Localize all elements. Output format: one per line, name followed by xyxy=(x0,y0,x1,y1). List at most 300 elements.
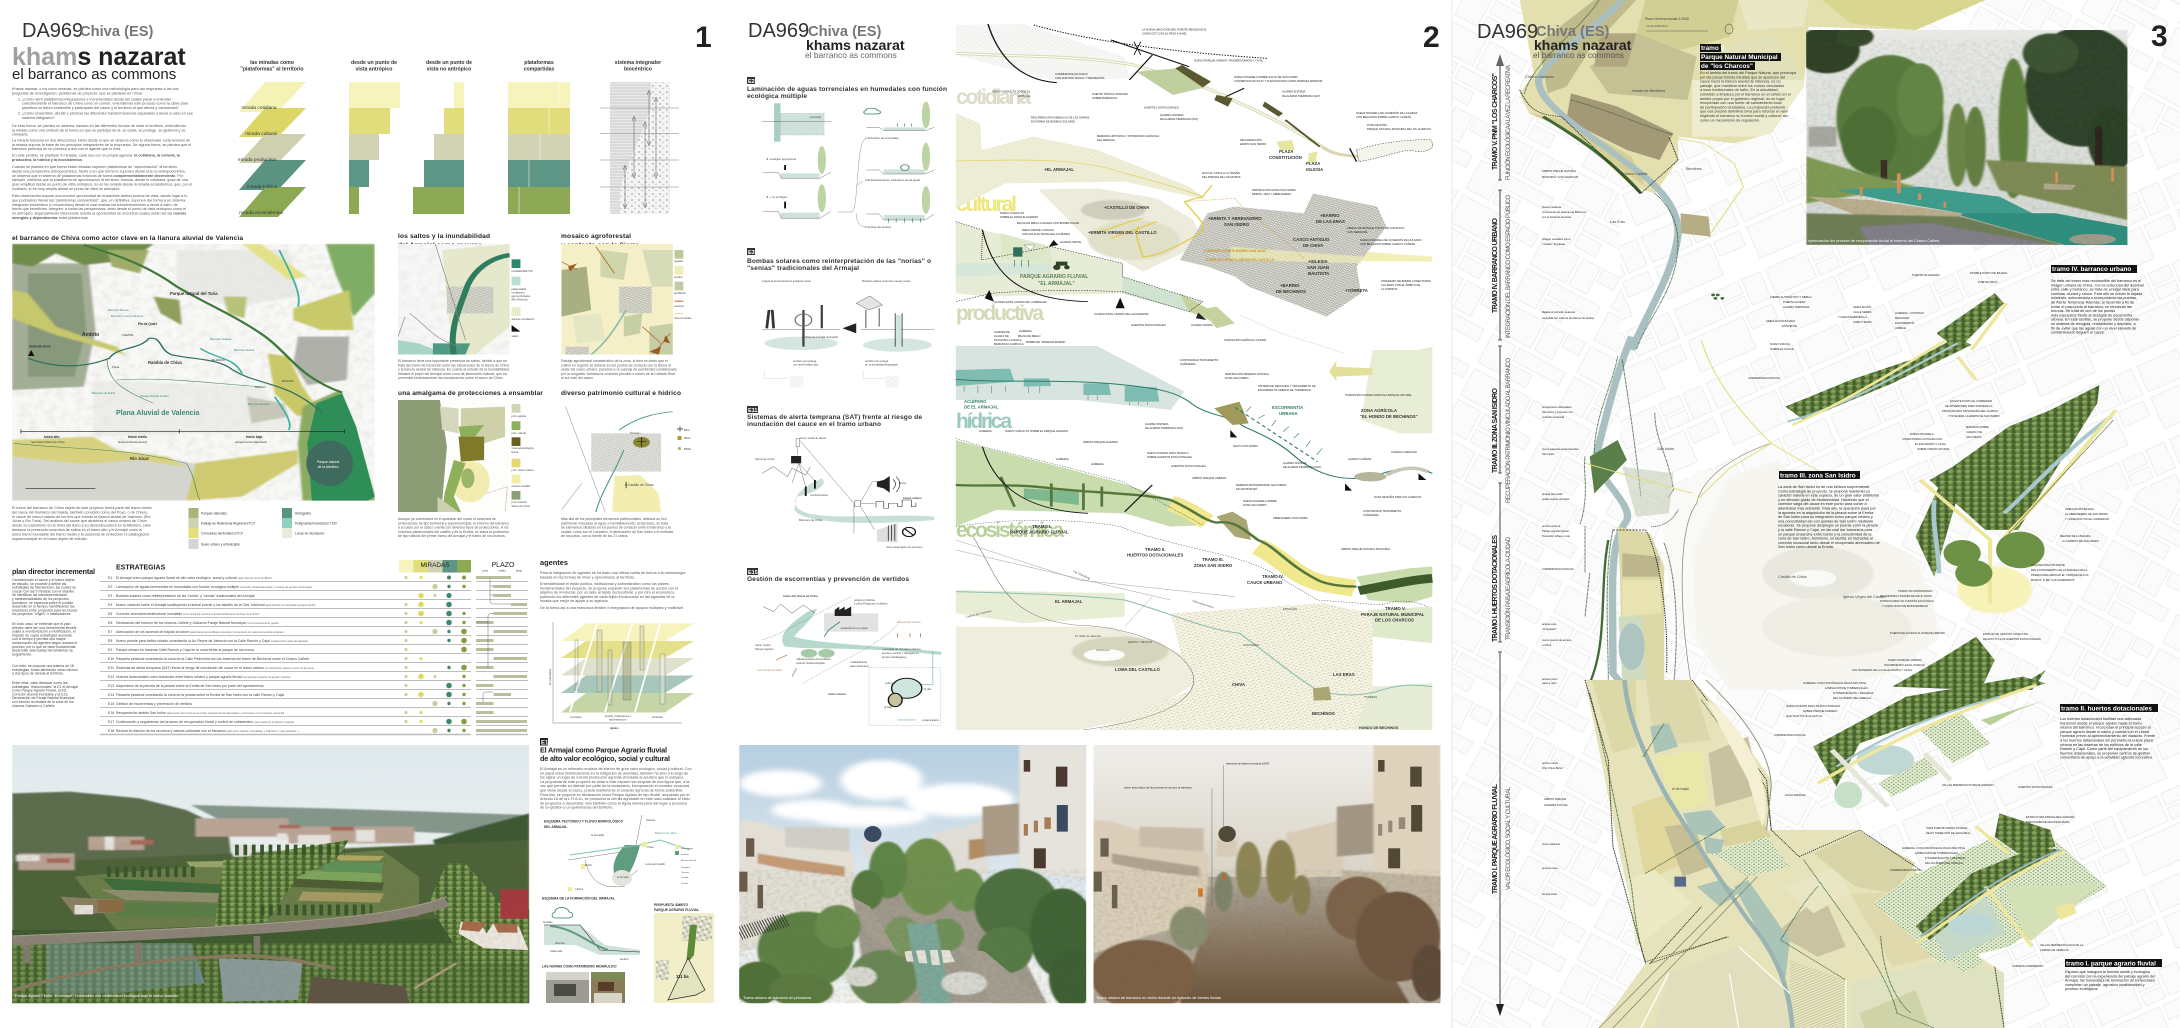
E3 section: solar pumps: Bombas solares como las nuevas norias xyxy=(862,279,911,283)
map annotations: ERMITA SAN ISIDRO xyxy=(1240,142,1266,146)
E1 diagram: tectonic scheme: Buñol xyxy=(585,863,592,867)
E2 section: wetlands: 3.recarga del acuífero xyxy=(865,225,892,229)
plan annotations: nueva pasarela peatonal sobre xyxy=(1542,447,1579,451)
E15 section: runoff management: tramo medio xyxy=(755,643,771,647)
regional map legend: Suelo urbano y urbanizable xyxy=(201,542,240,546)
map annotations: RECUPERACIÓN xyxy=(1240,137,1262,142)
plan annotations: MUNICIPAL "LOS CHARCOS" xyxy=(1542,175,1579,179)
mosaico legend labels: secano xyxy=(674,276,683,279)
protections text xyxy=(398,517,509,538)
mirada labels: productiva xyxy=(956,302,1044,325)
proposed area map: 111 ha xyxy=(676,974,689,979)
street render: flood: Tramo urbano de barranco en otoño durante un episodio de fuertes lluvias xyxy=(1096,996,1221,1000)
tramo V side label: TRAMO V. PNM "LOS CHARCOS" xyxy=(1492,73,1499,170)
table headers: MIRADAS xyxy=(420,562,450,569)
tramo I text block: Armajal, los humedales de laminación de torrenciales xyxy=(2065,979,2155,983)
place names on plan: Castillo de Chiva xyxy=(1778,575,1806,579)
plan director text: desarrollar adecuadas herramientas de xyxy=(12,649,73,653)
plan annotations: SE ADENTRA A TRAVÉS DE ESTE JUNTO xyxy=(1880,593,1932,598)
plan annotations: MOROS" O DE "LOS ALMENDROS" xyxy=(2031,578,2075,582)
intro text block: colectivamente el barranco de Chiva como un común, entendiendo este proceso como la clave para xyxy=(22,102,189,106)
strategy list text: E14 xyxy=(108,693,114,697)
street render: flood: sistemas de alerta temprana (SAT) xyxy=(1226,762,1269,766)
central stacked map of five miradas: Pl. Ollas de Valencia xyxy=(1075,634,1101,638)
plan annotations: PINADA PARA AMPLIAR EL "PARQUE DE LOS xyxy=(2031,573,2089,577)
mosaico text: Paisaje agroforestal característico de la zona, si bien es cierto que el xyxy=(561,359,668,363)
title block panel 3: el barranco as commons xyxy=(1533,50,1624,60)
plan annotations: Nueva pasarela xyxy=(1542,205,1561,209)
strategy list text: Sistemas de alerta temprana (SAT) frente al riesgo de inundación del cauce en el tramo urbano (monitorización, alarma y cierre de accesos) xyxy=(116,666,314,670)
intro text block: En este sentido, se plantean 5 miradas, cada una con su propia agencia: la cotidiana, la cultural, la xyxy=(12,154,181,158)
street render: flood xyxy=(1090,745,1448,1010)
agents diagram: stacked sectors chart: ámbito, instituciones y xyxy=(605,714,632,718)
E1 diagram: tectonic scheme: Charcos xyxy=(681,871,690,874)
regional map of the Valencia alluvial plain: Paisaje Alcalde del Río xyxy=(140,394,169,398)
plan director text: charcos Gabacho y Cañete. xyxy=(12,704,55,708)
plan annotations xyxy=(1542,169,2109,968)
plan annotations: NUEVA PASARELA xyxy=(1910,432,1934,436)
regional map of the Valencia alluvial plain: Barranco Gallego xyxy=(210,337,232,341)
plan annotations: INCORPORADO EN EL PARQUE xyxy=(1884,663,1925,667)
regional map of the Valencia alluvial plain: Rambla de Chiva xyxy=(148,360,182,365)
plan annotations: SAN ISIDRO xyxy=(1966,435,1982,439)
plan director text: los proyectos "origen" o catalizadores. xyxy=(12,612,71,616)
central stacked map of five miradas: SAN JUAN xyxy=(1307,265,1329,270)
heritage text: de elementos situados en los puntos de contacto entre el barranco y la xyxy=(561,526,671,530)
table headers: largo xyxy=(516,568,522,572)
map annotations: ESCORRENTÍA URBANA DE TORRENCIAL xyxy=(1258,388,1312,392)
plan director text: Con esto, se propone una batería de 18 xyxy=(12,664,74,668)
plan director text: de identificar las interdependencias xyxy=(12,593,67,597)
alert diagram xyxy=(762,438,934,543)
map annotations: HUMEDAL xyxy=(1056,457,1070,461)
plan director text: a dos tipos de mirada al territorio. xyxy=(12,672,64,676)
plan annotations: Bajada al corredor peatonal xyxy=(1542,310,1575,314)
plan annotations: HUMEDAL CON FUNCIÓN ECOLÓGICA MÚLTIPLE xyxy=(1803,680,1866,685)
tramo V text block: En el ámbito del tramo del Parque Natural, que preocupa xyxy=(1700,71,1797,75)
central stacked map of five miradas: IGLESIA xyxy=(1306,167,1323,172)
tramo III text block: carácter natural en este espacio, de un gran valor ambiental xyxy=(1778,494,1879,498)
E1 diagram: tectonic scheme: la Serratilla xyxy=(591,833,605,837)
plan director heading: plan director incremental xyxy=(12,567,95,576)
intro text block: no antrópico. Especialmente interesante resulta la oportunidad de encontrar cuales serán así las nuevas xyxy=(12,212,186,216)
regional map of the Valencia alluvial plain: tramo medio xyxy=(128,435,147,439)
regional map of the Valencia alluvial plain xyxy=(12,244,375,501)
strategy list text: E12 xyxy=(108,675,114,679)
strategy list text: E5 xyxy=(108,612,112,616)
strategy list text: Adquisición de la parcela de la pinada sobre la Ermita de San Isidro por parte del ayuntamiento xyxy=(116,684,264,688)
E2 section: wetlands: III. + río ecológico xyxy=(766,195,788,199)
central stacked map of five miradas: LAS ERAS xyxy=(1333,672,1355,677)
saltos legend labels: inundación xyxy=(512,290,525,294)
heading: los saltos xyxy=(398,233,490,249)
tramo III text block: corredor ecosocial tanto desde el recuperado abrevadero de xyxy=(1778,541,1880,545)
strategy list text: Huertos dotacionales como transición entre tramo urbano y parque agrario fluvial incorporando espacios de gestión colectiva xyxy=(116,675,291,679)
plan annotations: Y COMO NODO DE BIODIVERSIDAD xyxy=(1882,604,1928,608)
map annotations: DEPURACIÓN RESERVA NATURAL xyxy=(1225,371,1270,376)
intro text block: Esta observación supone una enorme oportunidad de ensamblar ambos puntos de vista, dando lugar a lo xyxy=(12,194,187,198)
wetland diagrams xyxy=(762,102,934,227)
E15 section: runoff management: tramo alto Sierra de Chiva xyxy=(783,594,818,598)
plan annotations: ÁMBITO PARQUE xyxy=(1544,797,1566,801)
regional map of the Valencia alluvial plain: tramo bajo xyxy=(246,435,262,439)
plan annotations: Chiv Chiva Buñol xyxy=(1542,766,1563,770)
regional map of the Valencia alluvial plain: desde la llanura aluvial xyxy=(118,440,147,444)
mosaico legend labels: pendiente xyxy=(674,291,686,295)
stacked parallelogram miradas: mirada cotidiana xyxy=(241,105,277,111)
central stacked map of five miradas: +BARRIO xyxy=(1280,283,1300,288)
E11 section: alert systems: monitorización xyxy=(810,493,828,497)
tramo V text block: como un mecanismo de regulación. xyxy=(1700,118,1760,122)
heritage legend: BRNs xyxy=(684,447,692,451)
plan annotations: ÁMBITO PARAJE NATURAL xyxy=(1542,169,1577,173)
strategy list text: E17 xyxy=(108,720,114,724)
map annotations: CON BECHINOS SOBRE CHARCO CAÑETE xyxy=(1360,241,1415,246)
plan annotations: Y CONEXIÓN CON EL CORREDOR xyxy=(2065,516,2109,521)
central stacked map of five miradas: DE BECHINOS xyxy=(1276,289,1306,294)
E15 section: runoff management: volumen xyxy=(885,681,896,685)
protections legend labels: Iberia xyxy=(512,450,519,454)
plan director text: Asimismo, se especula sobre el posible xyxy=(12,601,73,605)
plan scale: Plano General escala 1:2000 xyxy=(1645,17,1689,21)
plan annotations: pinada San Isidro xyxy=(1542,492,1563,496)
E11 section: alert systems: envío señal de alerta xyxy=(800,436,826,440)
regional map legend: Hidrografía xyxy=(295,512,311,516)
heritage legend: BICs xyxy=(684,428,690,432)
tramo III text block: Como estrategia de proyecto, se propone mantener su xyxy=(1778,489,1870,493)
sheet number 1: 1 xyxy=(695,21,712,54)
intro text block: comparte. xyxy=(12,133,29,137)
E2 section: wetlands xyxy=(747,77,947,229)
E1 text: de proyectos a desarrollar, sino también como la figura idónea para dar lugar a procesos xyxy=(540,801,687,805)
central stacked map of five miradas: DE LAS ERAS xyxy=(1316,219,1345,224)
title block panel 3: DA969 xyxy=(1477,21,1538,43)
central stacked map of five miradas: CAUCE URBANO xyxy=(1247,580,1283,585)
proposed area map: PROPUESTA ÁMBITO xyxy=(654,902,688,907)
map annotations: SOBRE EL PARQUE AGRARIO xyxy=(1000,215,1038,219)
tramo IV text block: tramo IV. barranco urbano xyxy=(2052,266,2131,273)
intro text block: preguntas de investigación -problemas de proyecto- que se plantean en Chiva: xyxy=(12,91,143,95)
central stacked map of five miradas xyxy=(956,24,1433,730)
tramo V side label: FUNCIÓN ECOLÓGICA A LA VEZ LA RECREATIVA xyxy=(1505,65,1512,180)
place names on plan: Hondo de Bechinos xyxy=(1632,89,1665,93)
title block panel 1 xyxy=(12,20,186,83)
tramo V text block: por las pocas formas miradas que se aparecen del xyxy=(1700,75,1785,79)
strategy list text: E7 xyxy=(108,630,112,634)
strategy list text: Adecuación de los accesos de bajada al cauce garantizando accesibilidad universal e incorporando los sistemas de alerta temprana xyxy=(116,630,284,634)
central stacked map of five miradas: CASCO ANTIGUO xyxy=(1293,237,1330,242)
map annotations: MEMORIA HISTÓRICA Y PATRIMONIO AGRÍCOLA xyxy=(1097,133,1159,138)
layer: hidrica xyxy=(956,346,1432,491)
tramo II text block: a los huertos dotacionales sin perímetro la nueva plaza xyxy=(2060,738,2154,742)
strategy list text: Pasarela peatonal conectando la zona de la Calle Pedroviña con las traseras del barrio de Bechinos sobre el Charco Cañete xyxy=(116,657,309,661)
heritage text: de los patos, con la fuente de los 21 caños. xyxy=(561,534,628,538)
E1 diagram: Armajal formation: ESQUEMA DE LA FORMACIÓN DEL ARMAJAL xyxy=(542,896,615,900)
table headers xyxy=(116,560,522,572)
plan director text: de estudio, se procede a definir las xyxy=(12,582,67,586)
heading: los saltos: del Armajal como recurso xyxy=(398,242,482,249)
tramo II text block: parque agrario desde el casco y cuenta con el Litoral xyxy=(2060,730,2149,734)
map: saltos and flooding xyxy=(396,244,520,355)
map annotations: ITINERARIO DE BORDE CONECTANDO xyxy=(1381,279,1431,283)
intro text block: planificar un futuro sostenible y participado del cauce y el territorio al que afecta y caracteriza? xyxy=(22,106,179,110)
E1 diagram: Armajal formation xyxy=(542,896,640,961)
central stacked map of five miradas: Vía Cheurfeng xyxy=(1073,569,1091,580)
strategy list text: Declaración del entorno de los charcos Cañete y Gabacho Paraje Natural Municipal como herramienta de gestión xyxy=(116,621,280,625)
tramo II text block: huertos dotacionales, se proponen centros de gestión xyxy=(2060,751,2150,755)
tramo III side label xyxy=(1492,358,1512,503)
plan director text: con función recreativa de la zona de los xyxy=(12,700,74,704)
E11 section: alert systems: Sierra de Chiva xyxy=(755,457,775,461)
strategy list text: E4 xyxy=(108,603,112,607)
tramo IV text block: de Alerta Temprana. Además, al recorrido a fin de xyxy=(2051,300,2134,304)
map annotations: DE ALARMA TEMPRANA (SAT) xyxy=(1283,465,1321,469)
strategy list text: Bombas solares como reinterpretación de las "norias" y "senias" tradicionales del Armajal xyxy=(116,594,255,598)
plan annotations: acceso norte al xyxy=(1542,524,1561,528)
map annotations: NUEVO PUENTE PARA TRÁFICO xyxy=(1147,451,1188,455)
E2 section: wetlands: ecológica múltiple xyxy=(747,93,807,100)
central stacked map of five miradas: TORRETA xyxy=(1364,695,1377,699)
tramo III text block: corredor salga del cauce en este punto para volver a xyxy=(1778,502,1868,506)
central stacked map of five miradas: DE LOS CHARCOS xyxy=(1375,618,1414,622)
saltos legend labels: área de inundación xyxy=(512,317,535,321)
E1 diagram: tectonic scheme: Barranco fluvial xyxy=(681,859,697,862)
E3 section: solar pumps: acuífero de Armajal recargado xyxy=(802,335,839,339)
tramo II text block: urbana en las traseras de los edificios de la calle xyxy=(2060,743,2142,747)
regional map description: único tramo inundable del tramo medio y la ausencia de protección ni catalogación xyxy=(12,532,149,536)
intro text block: integrador biocéntrico (o ecocéntrico) desde el cual evaluar las transformaciones a llevar a cabo, de xyxy=(12,203,178,207)
mirada labels: cotidiana xyxy=(956,86,1031,109)
E11 section: alert systems: Cauce urbano xyxy=(903,496,922,500)
place names on plan: San Isidro xyxy=(1657,447,1674,451)
plan director text: estrategias de intervención, las cuales se xyxy=(12,586,76,590)
E15 section: runoff management: E15 xyxy=(748,570,758,576)
E1 heading: El Armajal como Parque Agrario fluvial xyxy=(540,746,667,754)
intro text block: la mirada supone la base de los principios integradores de la propuesta. De alguna forma, se plantea que el xyxy=(12,143,191,147)
tramo IV text block xyxy=(2051,265,2144,335)
plan annotations: ALARMA TEMPRANA xyxy=(1783,305,1810,309)
map annotations: ZONA SAN ISIDRO xyxy=(1225,376,1249,380)
plan annotations: CORREDOR ECOSOCIAL xyxy=(1748,376,1781,380)
strategy list text: Corredor vicenal/cicloestructural inundable como ramal del corredor territorial del Barranco del Poyo de la ETCV xyxy=(116,612,260,616)
plan director text: como Parque Agrario Fluvial, la E5, xyxy=(12,689,67,693)
plan annotations: FITODEPURACIÓN Y RECARGA xyxy=(1833,690,1874,695)
regional map legend: Paisaje de Referencia Regional ETCV xyxy=(201,522,256,526)
runoff diagram xyxy=(762,597,941,726)
strategies table xyxy=(100,560,528,734)
stacked parallelogram miradas: mirada hídrica xyxy=(247,184,278,190)
plan annotations: CALLE SEDES xyxy=(1853,310,1872,314)
E1 diagram: Armajal formation: Cuaternario xyxy=(550,950,563,953)
axonometric vignette: parque agrario xyxy=(1874,813,2106,973)
tramo III text block: adentrarse más adelante. Para ello, la operación pasa por xyxy=(1778,506,1876,510)
plan annotations: bomba solar xyxy=(1542,892,1557,896)
biocentric integrating system diagram xyxy=(600,82,679,214)
map annotations: ZONA SAN ISIDRO xyxy=(1243,503,1267,507)
plan annotations: MIRADOR SOBRE xyxy=(1966,425,1989,429)
general plan corridor xyxy=(1520,0,2004,1028)
central stacked map of five miradas: ACUÍFERO xyxy=(964,399,987,404)
strategy list text: Nuevo viaducto sobre el Armajal sustituyendo el actual puente y los taludes de la Ctra. Nacional garantizando la continuidad ecológica del PA xyxy=(116,603,316,607)
E1 diagram: Armajal formation: acuífero xyxy=(620,958,629,961)
map annotations: ACCESO ESTE CAMINO DEL AGUADADOR xyxy=(1094,312,1148,316)
plan annotations: CORREDOR ECOSOCIAL xyxy=(1774,733,1807,737)
intro text block: sinergias y dependencias entre plataformas. xyxy=(12,216,89,220)
plan annotations: PUERTA DE ACCESO AL PARQUE URBANO xyxy=(1890,631,1945,635)
table row separators xyxy=(100,582,528,726)
plan annotations: CAMINOS A PERÍMETRO xyxy=(2012,964,2044,968)
E15 section: runoff management: Parque Agrario xyxy=(755,647,774,651)
central stacked map of five miradas: +TORRETA xyxy=(1345,288,1368,293)
saltos text xyxy=(398,359,510,380)
tramo V text block: sometido a limpieza por el barranco en el cañizo en el xyxy=(1700,92,1791,96)
E2 section: wetlands: 1.laminación de torrenciales xyxy=(865,136,899,140)
heading: amalgama: una amalgama de protecciones a ensamblar xyxy=(398,390,543,397)
heritage text: Más allá de los principales elementos patrimoniales, destaca un rico xyxy=(561,517,667,521)
tramo V text block: paisaje, que mantiene entre los cursos vinculados xyxy=(1700,84,1784,88)
tramo IV text block: fin de evitar que las aguas con un nivel elevado de xyxy=(2051,326,2136,330)
tramo V text block: cauce hacia la llanura aluvial de Valencia, es un xyxy=(1700,80,1781,84)
mosaico text: al sur este del casco. xyxy=(561,376,594,380)
plan annotations: SOBRE TRAMO NATURAL xyxy=(1917,447,1950,451)
strategy list text: Recuperación ámbito San Isidro (adecuación de la zona de la ermita, recuperación del abrevadero y conexiones con el corredor ecosocial) xyxy=(116,711,284,715)
intro text block: productiva, la hídrica y la ecosistémica. xyxy=(12,158,83,162)
map annotations: CAMINANTE xyxy=(994,330,1010,334)
tramo III text block: y la calle Ramón y Cajal, en las cual dar barrancos para xyxy=(1778,528,1873,532)
map annotations: CHARCO GABACHO xyxy=(1391,450,1417,454)
strategy list text: Parque urbano en traseras Calle Ramón y Cajal en la zona frente al parque de los moros xyxy=(116,648,254,652)
map annotations: ALARMA SISTEMA xyxy=(1145,422,1169,426)
mirada labels: cultural xyxy=(956,193,1017,216)
heading: diverso patrimonio: diverso patrimonio cultural e hídrico xyxy=(561,390,681,397)
saltos legend labels: peligrosidad xyxy=(512,287,526,291)
protections legend labels: zona arqueológica xyxy=(512,446,534,450)
E3 section: solar pumps: acuífero de recarga xyxy=(865,359,889,363)
regional map description: destacar la presencia conectiva de saltos en el tramo alto y el Armajal como el xyxy=(12,528,142,532)
agentes text xyxy=(540,571,686,610)
tramo IV text block: más expuestos frente al desagüe de escorrentía xyxy=(2051,313,2133,317)
map annotations: SOBRE BARRANCO xyxy=(1092,96,1117,100)
plan annotations: nuevo viaducto xyxy=(1542,842,1561,846)
column headings of platforms diagram xyxy=(240,60,661,72)
tramo IV text block: urbana. En este sentido, se propone desde disponer xyxy=(2051,318,2140,322)
layer: cultural xyxy=(956,113,1432,317)
mirada labels: hídrica xyxy=(956,410,1012,433)
proposed area map xyxy=(654,902,714,1003)
tramo I text block: completan un paisaje, agrosilvo biodiversidad y xyxy=(2065,983,2145,987)
map annotations: ABRIGO DE BOSQUE PUNTO DE CONTACTO xyxy=(1347,226,1404,230)
plan annotations: CAMINO DE CERRAJA xyxy=(2040,948,2069,952)
central stacked map of five miradas: URBANA xyxy=(1279,411,1298,416)
map annotations: SOBRE HUERTOS DOTACIONALES xyxy=(1147,455,1192,459)
tramo III text block: una conectividad así con quintas de San Isidro mediante xyxy=(1778,519,1873,523)
map: protections xyxy=(398,400,520,512)
heritage legend: BRLs xyxy=(684,436,691,440)
plan annotations: DEL ACUÍFERO DEL ARMAJAL xyxy=(1925,861,1964,865)
vertical tramo axis xyxy=(1496,54,1504,1016)
tramo III side label: TRAMO III. ZONA SAN ISIDRO xyxy=(1492,387,1499,473)
table headers: ESTRATEGIAS xyxy=(116,564,166,572)
E11 section: alert systems xyxy=(747,406,934,549)
strategy list text: Laminación de aguas torrenciales en humedales con función ecológica múltiple (retención, filtrado/depuración y recarga del acuífero del Armajal) xyxy=(116,585,312,589)
plan annotations: LAS TRASERAS DE LA CALLE RAMÓN Y CAJAL xyxy=(1852,667,1913,672)
agents diagram: stacked sectors chart: territorial xyxy=(652,715,663,719)
plan director text: estrategias, todas afectando como mínimo xyxy=(12,668,78,672)
central stacked map of five miradas: EL ARMAJAL xyxy=(1055,599,1083,604)
tramo IV text block: conectar ciudad y cauce. Para ello se unirán la bajada xyxy=(2051,292,2143,296)
strategy list text xyxy=(108,576,316,733)
map annotations: NUEVA PASARELA SOBRE SALTO DE SAN ISIDRO xyxy=(1234,75,1298,79)
plan annotations: Y NUEVA BARANDILLA xyxy=(1838,315,1867,319)
sheet number 3: 3 xyxy=(2151,20,2168,53)
E15 section: runoff management: cuando SI+Decantiplax xyxy=(796,661,825,665)
tramo III text block: La zona de San Isidro es de una belleza sorprendente. xyxy=(1778,485,1870,489)
tramo IV text block: evitar el paso junto al barranco, se renuevan las xyxy=(2051,305,2132,309)
mosaico text: por la orografía. Destaca la conexión peculiar a través de la Cañada Real xyxy=(561,372,675,376)
plan director text: proceso, por lo que se hace fundamental xyxy=(12,645,76,649)
map annotations: LA TORRETA xyxy=(1381,287,1398,291)
mosaico text: cultivo en regadío se detiene en los puntos de contacto con la Sierra al xyxy=(561,363,671,367)
protections text: a su paso por el casco cuenta con diversos tipos de protecciones. A los xyxy=(398,526,509,530)
tramo IV text block: imagen urbana de Chiva. Con la reducción del desnivel xyxy=(2051,283,2144,287)
central stacked map of five miradas: TRAMO V. xyxy=(1385,606,1406,611)
regional map description: del cauce del Barranco del Saleta, también conocido como del Poyo, o de Chiva), xyxy=(12,510,148,514)
E1 text: que viene desde el casco, pueda mantenerse el carácter agrícola de forma sostenible. xyxy=(540,788,683,792)
plan director text: Declaración de Paraje Natural Municipal xyxy=(12,696,75,700)
plan annotations: AGRARIO FLUVIAL xyxy=(1544,803,1569,807)
E15 section: runoff management: escorrentía urbana xyxy=(897,620,921,624)
E15 section: runoff management: +Biodepuración Humedales xyxy=(796,657,831,661)
central stacked map of five miradas: SAN ISIDRO xyxy=(1243,643,1260,647)
E1 diagram: tectonic scheme: ESQUEMA TECTÓNICO Y FLUVIO MORFOLÓGICO xyxy=(544,818,624,824)
regional map of the Valencia alluvial plain: Parque natural xyxy=(317,460,339,464)
central stacked map of five miradas: TRAMO II. xyxy=(1145,547,1166,552)
mirada labels xyxy=(956,86,1064,542)
map annotations: HUMEDAL xyxy=(1019,329,1033,333)
plan director text xyxy=(12,578,78,708)
panel 3: general plan with axonometric details xyxy=(1452,0,2180,1028)
map annotations: NUEVA PASARELA SOBRE xyxy=(1243,499,1277,503)
map annotations: RESERVA BIODIVERSIDAD SAN ISIDRO xyxy=(1236,483,1287,487)
map annotations: LAS ERAS CON EL ÁMBITO DE xyxy=(1381,283,1420,287)
E15 section: runoff management: a depuradora xyxy=(922,718,939,722)
heading: los saltos: los saltos y la inundabilidad xyxy=(398,233,490,240)
street render: flood: cierre automático de las puertas de acceso al barranco xyxy=(1124,786,1193,790)
agentes text: fundamentales del proyecto, se propone expandir sus plataformas de acción con el xyxy=(540,586,678,590)
plan annotations: SOBRE EL CAUCE xyxy=(1770,347,1794,351)
regional map of the Valencia alluvial plain: Barranco de Buñol xyxy=(92,391,116,395)
plan director text: sujeta a monitorización y modificación, el xyxy=(12,630,76,634)
saltos text: El barranco tiene una importante presencia de saltos, debido a que se xyxy=(398,359,507,363)
plan annotations: DEL ACUÍFERO DEL ARMAJAL xyxy=(1833,696,1872,700)
plan annotations: VALLAS PERÍMETRO AGUA DE LA xyxy=(2040,943,2083,947)
column headings of platforms diagram: "plataformas" al territorio xyxy=(240,66,304,72)
regional map of the Valencia alluvial plain: parque huerta Valenciana xyxy=(235,440,267,444)
E11 section: alert systems: Barranco de Chiva xyxy=(799,518,823,522)
map annotations: NUEVO VIADUCTO SOBRE EL PARQUE AGRARIO xyxy=(1005,429,1068,433)
protections text: entornos patrimoniales del castillo y de la Ermita, se suma la protección xyxy=(398,530,509,534)
tramo V text block: ámbito propio por el gobierno regional, es un lugar xyxy=(1700,97,1786,101)
E2 section: wetlands: Humedal xyxy=(810,115,821,119)
map annotations: PARQUE NATURAL MUNICIPAL DE LOS CHARCOS xyxy=(1367,127,1431,131)
plan annotations: acceso este xyxy=(1542,622,1557,626)
regional map of the Valencia alluvial plain: Barranco Bonete xyxy=(108,308,129,312)
map annotations: EN FORMA DE BOMBAS SOLARES xyxy=(1031,120,1075,124)
central stacked map of five miradas: TRAMO I. xyxy=(1032,524,1051,529)
tramo V text block: tramo V. xyxy=(1701,45,1726,52)
map annotations: PUENTE TRÁFICO RODADO xyxy=(1092,92,1128,96)
tramo I text block: tramo I. parque agrario fluvial xyxy=(2066,960,2156,968)
